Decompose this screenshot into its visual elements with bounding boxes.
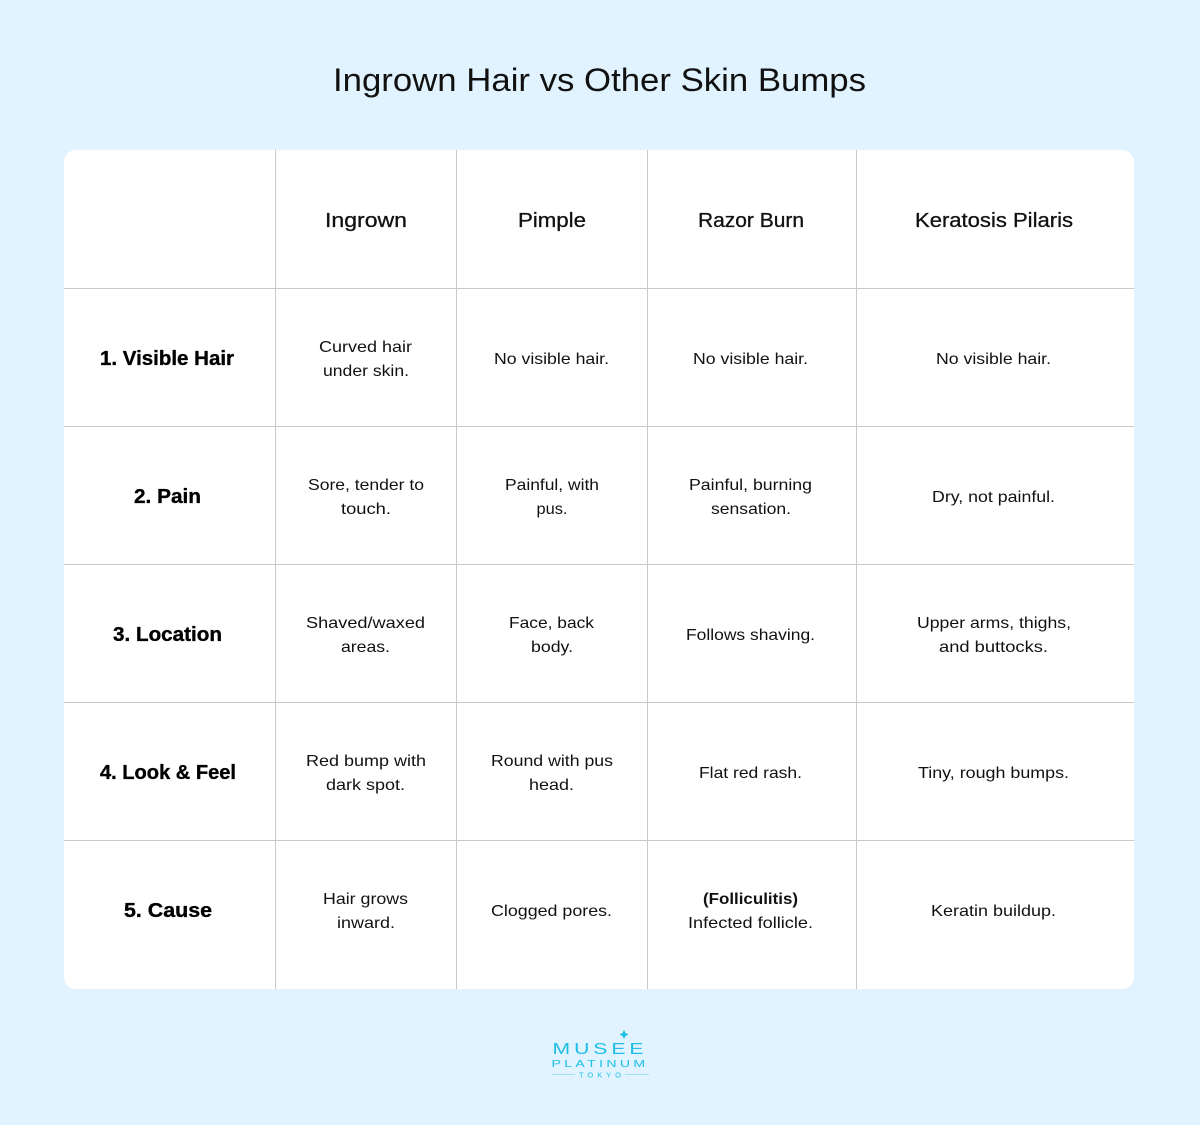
title: Ingrown Hair vs Other Skin Bumps bbox=[333, 62, 866, 98]
cell: pimple location bbox=[509, 615, 595, 656]
cell: keratosis visible hair: No visible hair. bbox=[936, 351, 1051, 368]
cell: keratosis cause: Keratin buildup. bbox=[931, 903, 1056, 920]
cell: ingrown location bbox=[306, 615, 425, 656]
cell: keratosis location: and buttocks. bbox=[939, 639, 1048, 656]
logo: Musee Platinum Tokyo: PLATINUM bbox=[552, 1058, 648, 1070]
cell: pimple look and feel: head. bbox=[529, 777, 574, 794]
cell: ingrown visible hair bbox=[319, 339, 413, 380]
cell: razor burn cause: (Folliculitis) bbox=[703, 891, 798, 908]
cell: pimple pain bbox=[505, 477, 599, 518]
cell: pimple look and feel bbox=[491, 753, 613, 794]
cell: ingrown pain: Sore, tender to bbox=[308, 477, 424, 494]
row label: 3. Location: 3. Location bbox=[113, 624, 222, 646]
cell: razor burn visible hair: No visible hair. bbox=[693, 351, 808, 368]
cell: ingrown visible hair: under skin. bbox=[323, 363, 409, 380]
cell: ingrown look and feel bbox=[306, 753, 426, 794]
cell: ingrown cause: Hair grows bbox=[323, 891, 408, 908]
cell: ingrown cause: inward. bbox=[337, 915, 395, 932]
cell: pimple location: Face, back bbox=[509, 615, 595, 632]
cell: razor burn pain: sensation. bbox=[711, 501, 791, 518]
cell: razor burn cause: Infected follicle. bbox=[688, 915, 813, 932]
row label: 1. Visible Hair: 1. Visible Hair bbox=[100, 348, 234, 370]
cell: ingrown location: Shaved/waxed bbox=[306, 615, 425, 632]
icon: logo star bbox=[620, 1030, 628, 1039]
header: Razor Burn: Razor Burn bbox=[698, 210, 804, 232]
cell: ingrown look and feel: dark spot. bbox=[326, 777, 405, 794]
cell: keratosis pain: Dry, not painful. bbox=[932, 489, 1055, 506]
cell: pimple cause: Clogged pores. bbox=[491, 903, 612, 920]
logo: Musee Platinum Tokyo: MUSEE bbox=[552, 1041, 648, 1058]
row label: 4. Look & Feel: 4. Look & Feel bbox=[100, 762, 236, 784]
cell: razor burn pain bbox=[689, 477, 812, 518]
cell: ingrown pain bbox=[308, 477, 424, 518]
cell: keratosis location bbox=[917, 615, 1071, 656]
header: Ingrown: Ingrown bbox=[325, 210, 407, 232]
cell: ingrown visible hair: Curved hair bbox=[319, 339, 413, 356]
cell: ingrown pain: touch. bbox=[341, 501, 391, 518]
cell: pimple pain: pus. bbox=[536, 501, 568, 518]
cell: ingrown look and feel: Red bump with bbox=[306, 753, 426, 770]
logo: Musee Platinum Tokyo bbox=[552, 1030, 649, 1080]
cell: razor burn look and feel: Flat red rash. bbox=[699, 765, 802, 782]
cell: pimple look and feel: Round with pus bbox=[491, 753, 613, 770]
cell: ingrown cause bbox=[323, 891, 408, 932]
header: Keratosis Pilaris: Keratosis Pilaris bbox=[915, 210, 1073, 232]
cell: keratosis location: Upper arms, thighs, bbox=[917, 615, 1071, 632]
cell: pimple location: body. bbox=[531, 639, 573, 656]
cell: pimple visible hair: No visible hair. bbox=[494, 351, 609, 368]
cell: keratosis look and feel: Tiny, rough bumps. bbox=[918, 765, 1069, 782]
row label: 2. Pain: 2. Pain bbox=[134, 486, 201, 508]
cell: ingrown location: areas. bbox=[341, 639, 390, 656]
cell: razor burn location: Follows shaving. bbox=[686, 627, 815, 644]
row label: 5. Cause: 5. Cause bbox=[124, 900, 212, 922]
header: Pimple: Pimple bbox=[518, 210, 586, 232]
cell: pimple pain: Painful, with bbox=[505, 477, 599, 494]
cell: razor burn pain: Painful, burning bbox=[689, 477, 812, 494]
logo: Musee Platinum Tokyo: TOKYO bbox=[579, 1070, 621, 1080]
cell: razor burn cause bbox=[688, 891, 813, 932]
panel: comparison table bbox=[64, 150, 1134, 989]
